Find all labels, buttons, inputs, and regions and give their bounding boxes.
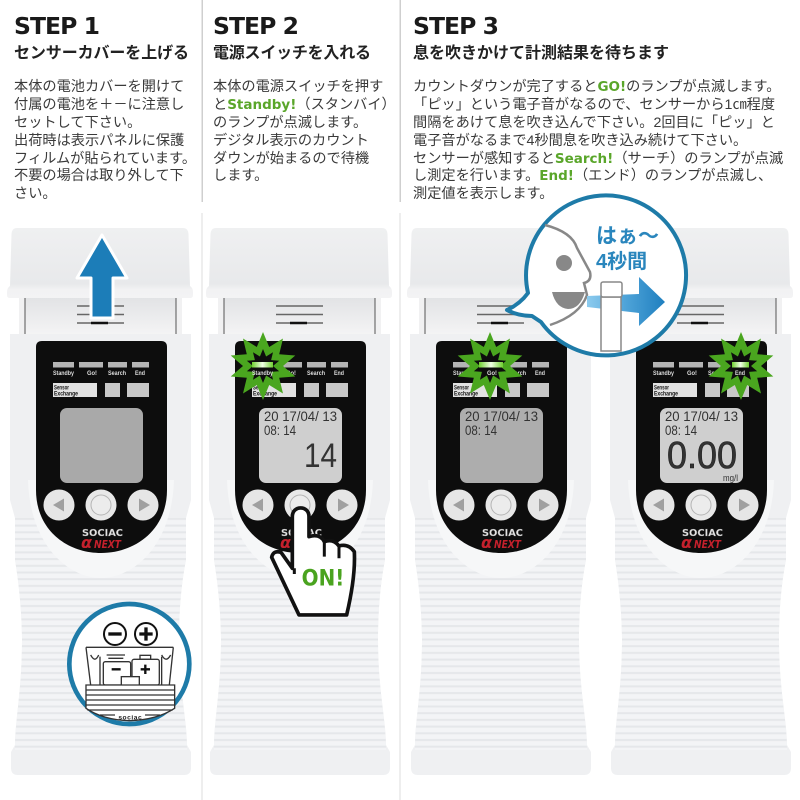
device panel labels: Search: [307, 370, 325, 377]
device panel labels: Exchange: [654, 390, 678, 398]
device panel labels: End: [535, 370, 545, 377]
device panel labels: Go!: [286, 370, 296, 377]
device panel labels: Sensor: [654, 384, 669, 392]
device panel labels: Exchange: [54, 390, 78, 398]
text block: step 3 instructions: し測定を行います。End!（エンド）のランプが点滅し、: [413, 168, 772, 184]
arrow: lift cover: [77, 235, 127, 318]
device panel labels: Exchange: [253, 390, 277, 398]
device panel labels: Go!: [687, 370, 697, 377]
device logo: [681, 528, 723, 552]
text block: step 3 instructions: 測定値を表示します。: [413, 186, 553, 202]
display: countdown: [259, 408, 342, 483]
device panel labels: Search: [708, 370, 726, 377]
text block: step 1 instructions: 本体の電池カバーを開けて: [14, 79, 184, 95]
starburst: end lamp: [709, 332, 773, 400]
label: haa: はぁ～: [596, 225, 659, 248]
subheading: step 3: 息を吹きかけて計測結果を待ちます: [413, 43, 669, 62]
text block: step 3 instructions: カウントダウンが完了するとGO!のランプが点滅します。: [413, 79, 780, 95]
text block: step 3 instructions: 電子音がなるまで4秒間息を吹き込み続けて下さい。: [413, 132, 747, 149]
text block: step 3 instructions: 「ピッ」という電子音がなるので、センサーから1㎝程度: [413, 96, 775, 113]
device panel labels: [653, 370, 726, 398]
device panel labels: Sensor: [54, 384, 69, 392]
device logo: [81, 528, 123, 552]
device logo: [280, 528, 322, 552]
starburst: standby lamp: Standby: [252, 370, 273, 377]
device logo: NEXT: [694, 539, 722, 551]
display: countdown: 14: [304, 437, 337, 475]
display: result: 0.00: [667, 435, 737, 477]
text block: step 2 instructions: ダウンが始まるので待機: [213, 151, 369, 167]
text block: step 2 instructions: デジタル表示のカウント: [213, 132, 369, 149]
arrow: breath direction: [587, 277, 665, 326]
text block: step 1 instructions: 不要の場合は取り外して下: [14, 167, 184, 184]
device logo: SOCIAC: [281, 528, 322, 539]
label: ON!: ON!: [302, 567, 344, 592]
text block: step 3 instructions: センサーが感知するとSearch!（サーチ）のランプが点滅: [413, 150, 783, 167]
text block: step 1 instructions: [14, 79, 196, 202]
subheading: step 2: 電源スイッチを入れる: [213, 44, 371, 62]
device logo: NEXT: [94, 539, 122, 551]
text block: step 3 instructions: 間隔をあけて息を吹き込んで下さい。2回目に「ピッ」と: [413, 114, 775, 131]
icon: plus: [135, 623, 157, 645]
device panel labels: End: [334, 370, 344, 377]
device logo: SOCIAC: [482, 528, 523, 539]
device logo: α: [481, 533, 493, 552]
display: date and time: [460, 408, 543, 483]
device panel labels: Sensor: [253, 384, 268, 392]
label: 4 seconds: 4秒間: [596, 250, 647, 273]
text block: step 2 instructions: します。: [213, 168, 268, 184]
device panel labels: Standby: [453, 370, 474, 377]
display: result: 20 17/04/ 13: [665, 408, 738, 424]
device logo: α: [681, 533, 693, 552]
device panel labels: Search: [508, 370, 526, 377]
battery compartment drawing: [86, 647, 175, 721]
text block: step 3 instructions: [413, 79, 783, 202]
text block: step 1 instructions: セットして下さい。: [14, 115, 141, 131]
display: result: [660, 408, 743, 483]
device panel labels: Search: [108, 370, 126, 377]
device: step 3 right: [607, 228, 793, 775]
panel: step 2 text: [213, 12, 396, 184]
subheading: step 1: センサーカバーを上げる: [14, 44, 189, 62]
display: date and time: 20 17/04/ 13: [465, 408, 538, 424]
display: countdown: 20 17/04/ 13: [264, 408, 337, 424]
device panel labels: Standby: [653, 370, 674, 377]
battery inset: [69, 604, 189, 724]
icon: pressing hand: [272, 508, 354, 615]
sensor tube: [601, 282, 622, 351]
panel: step 3 text: [413, 12, 783, 202]
starburst: standby lamp: [231, 332, 295, 400]
text block: step 1 instructions: さい。: [14, 186, 57, 202]
device panel labels: Sensor: [454, 384, 469, 392]
device logo: [481, 528, 523, 552]
device logo: NEXT: [293, 539, 321, 551]
text block: step 2 instructions: のランプが点滅します。: [213, 115, 367, 131]
heading: step 1: STEP 1: [14, 12, 100, 40]
starburst: go lamp: Go!: [487, 370, 497, 377]
text block: step 2 instructions: とStandby!（スタンバイ）: [213, 97, 396, 113]
device panel labels: [252, 370, 344, 398]
display: result: mg/l: [723, 473, 738, 483]
starburst: go lamp: [458, 332, 522, 400]
device panel labels: Go!: [87, 370, 97, 377]
device logo: NEXT: [494, 539, 522, 551]
device panel labels: End: [135, 370, 145, 377]
heading: step 2: STEP 2: [213, 12, 299, 40]
heading: step 3: STEP 3: [413, 12, 499, 40]
text block: step 2 instructions: [213, 79, 396, 184]
device panel labels: Standby: [252, 370, 273, 377]
device panel labels: Standby: [53, 370, 74, 377]
display: countdown: 08: 14: [264, 422, 296, 438]
display: result: 08: 14: [665, 422, 697, 438]
device logo: α: [280, 533, 292, 552]
device: step 2: [206, 228, 392, 775]
divider: between step 2 and 3: [400, 0, 401, 202]
display: date and time: 08: 14: [465, 422, 497, 438]
device logo: SOCIAC: [682, 528, 723, 539]
panel: step 1 text: [14, 12, 196, 202]
text block: step 1 instructions: 出荷時は表示パネルに保護: [14, 133, 184, 149]
device panel labels: Exchange: [454, 390, 478, 398]
face: [545, 225, 590, 325]
divider: between step 1 and 2: [202, 0, 203, 202]
icon: minus: [104, 623, 126, 645]
device logo: α: [81, 533, 93, 552]
device: step 3 left: [407, 228, 593, 775]
blank display: [60, 408, 143, 483]
text block: step 2 instructions: 本体の電源スイッチを押す: [213, 79, 383, 95]
device logo: SOCIAC: [82, 528, 123, 539]
device: step 1: [7, 228, 193, 775]
device panel labels: [453, 370, 545, 398]
text block: step 1 instructions: フィルムが貼られています。: [14, 151, 196, 167]
speech bubble: breath: [507, 195, 686, 355]
starburst: end lamp: End: [735, 370, 745, 377]
text block: step 1 instructions: 付属の電池を＋－に注意し: [14, 97, 184, 113]
device panel labels: [53, 370, 145, 398]
battery inset: sociac: [118, 715, 142, 722]
